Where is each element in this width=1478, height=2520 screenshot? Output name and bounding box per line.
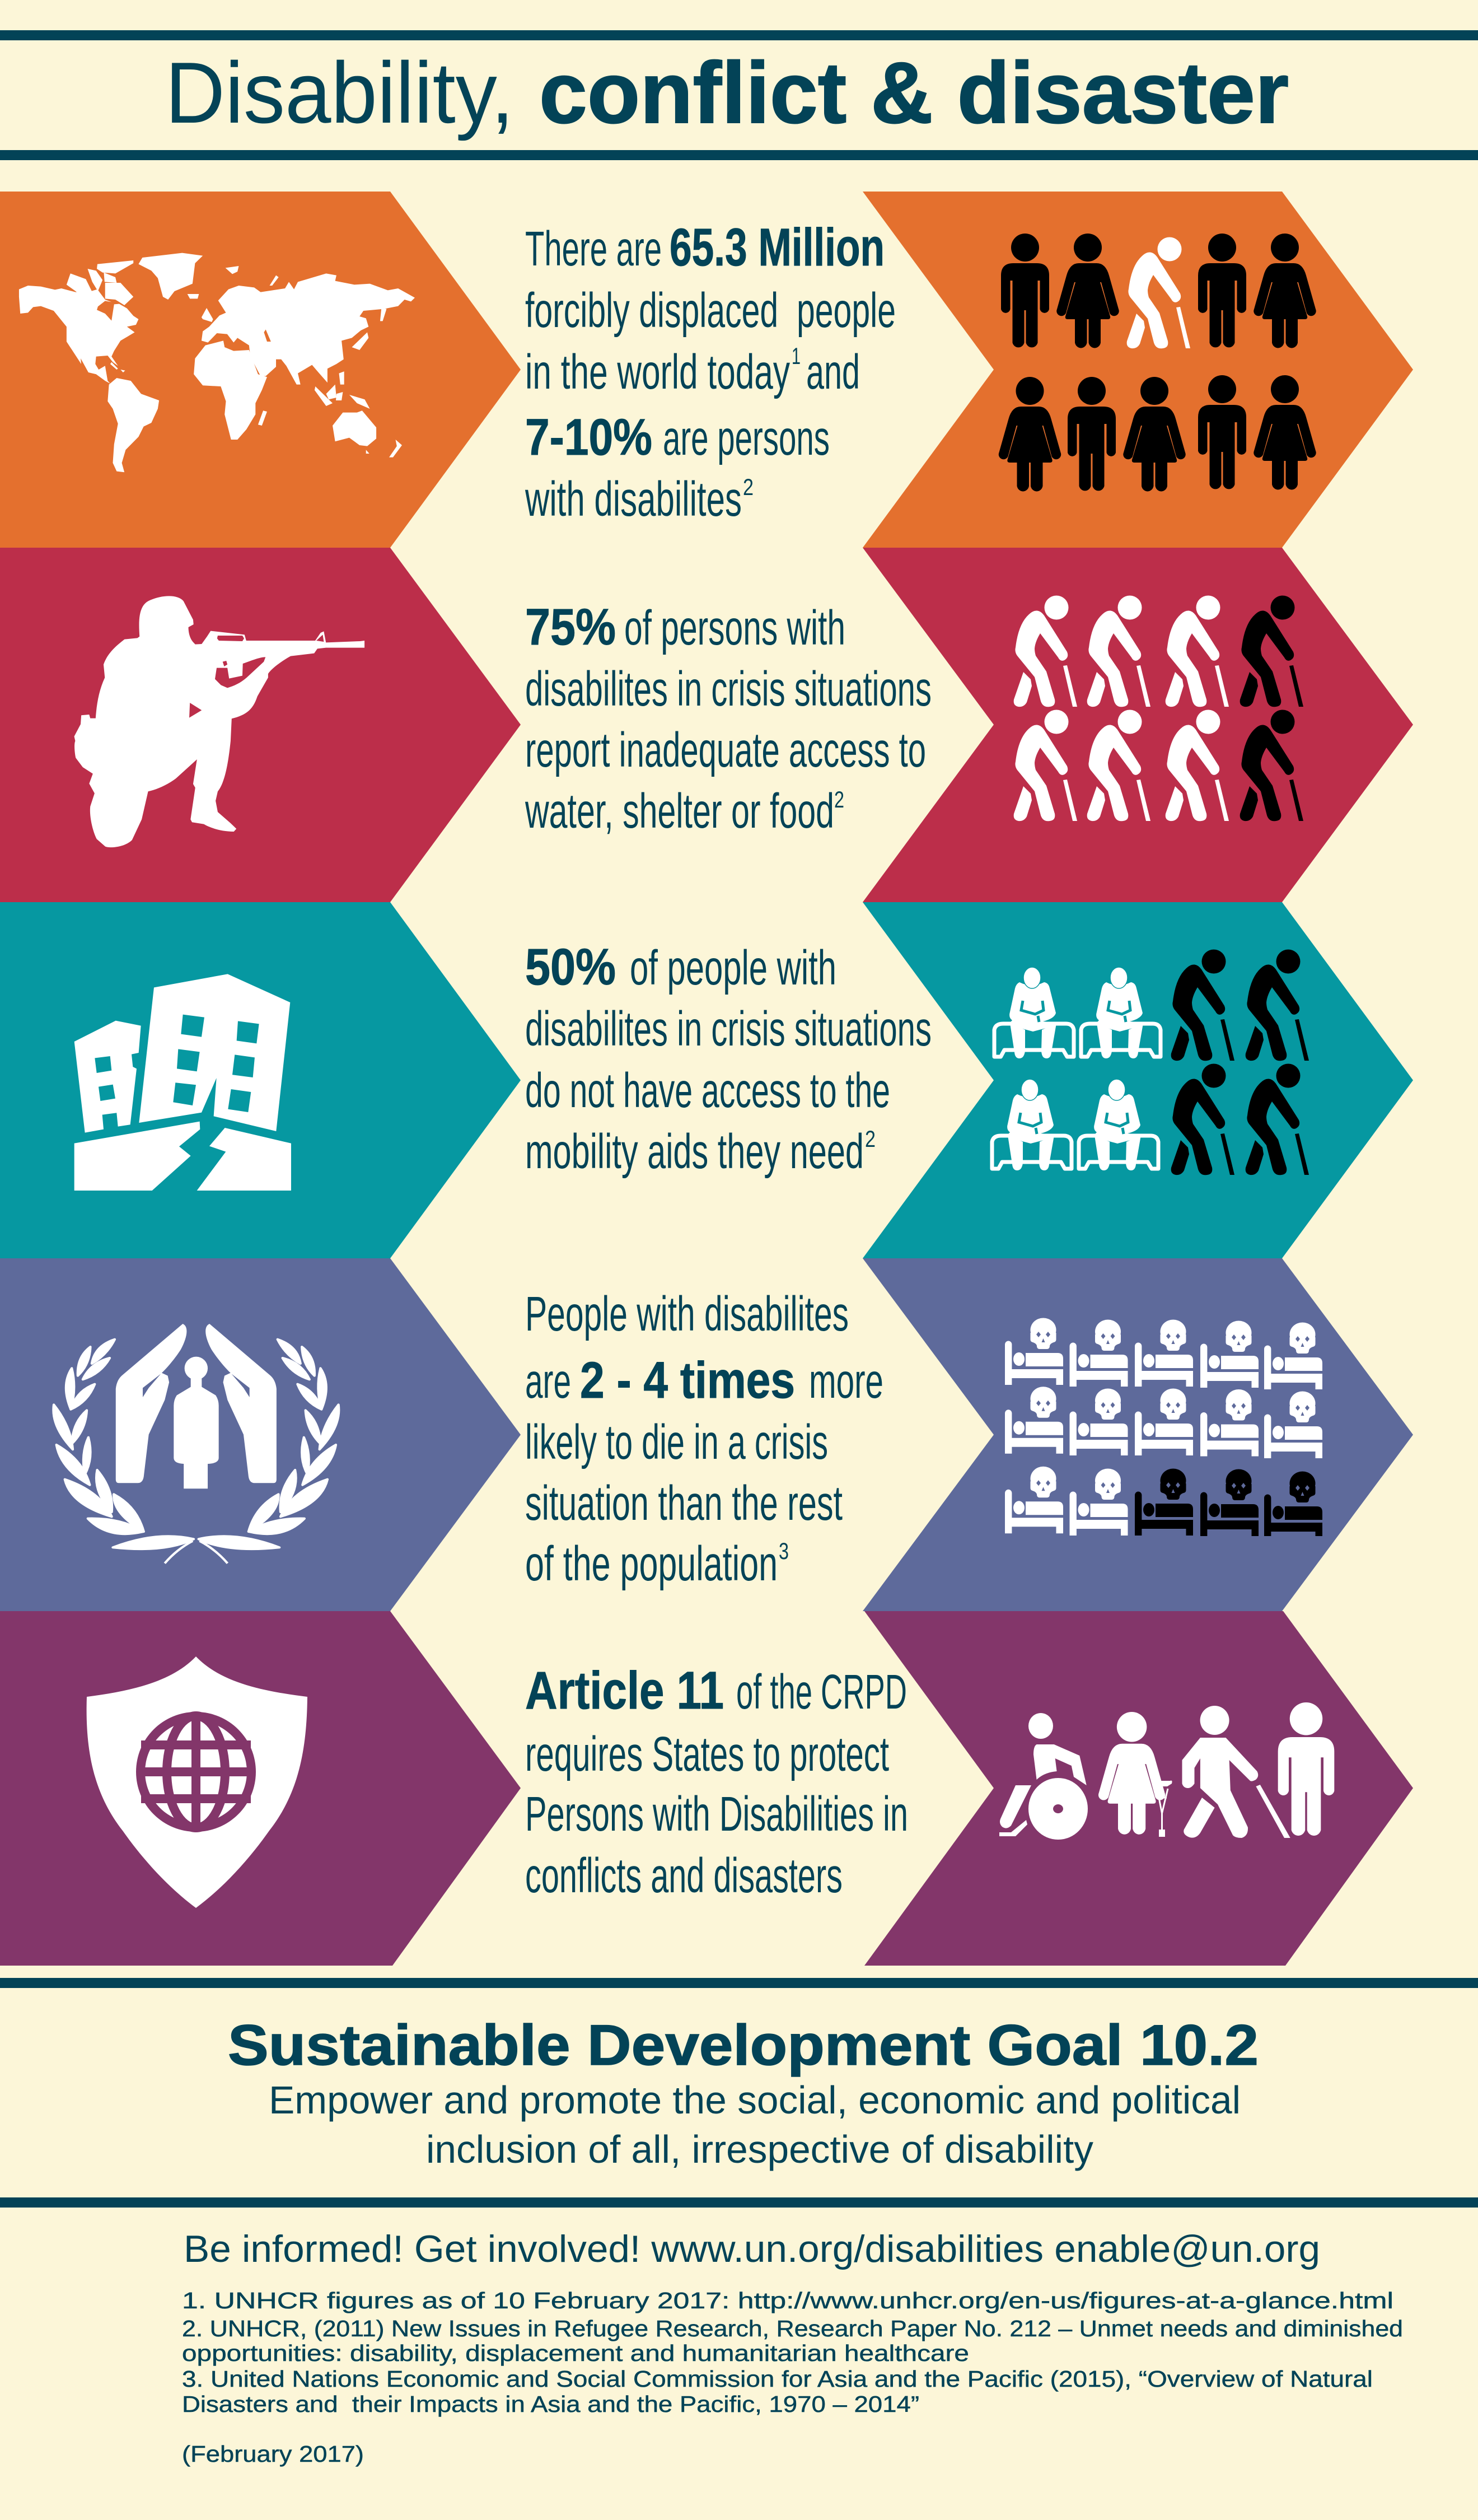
header rule top	[0, 30, 1478, 40]
text: displaced people statistic: There are	[525, 222, 662, 276]
title: conflict & disaster	[539, 44, 1289, 141]
teal right chevron	[863, 902, 1413, 1258]
text: mobility aids statistic: of people with	[630, 941, 836, 995]
text: Article 11 of the CRPD: requires States to protect	[525, 1727, 889, 1781]
footnotes: 2. UNHCR, (2011) New Issues in Refugee Research, Research Paper No. 212 – Unmet needs and diminished	[182, 2316, 1403, 2341]
text: inadequate access statistic	[525, 599, 932, 838]
call to action: Be informed! Get involved! www.un.org/disabilities enable@un.org	[184, 2228, 1320, 2270]
icon: wheelchair user	[999, 1713, 1088, 1840]
header rule bottom	[0, 150, 1478, 160]
text: mobility aids statistic: disabilites in crisis situations	[525, 1002, 932, 1056]
panel: mobility aids	[0, 902, 1413, 1258]
text: inadequate access statistic: disabilites in crisis situations	[525, 662, 932, 716]
section rule above goal	[0, 1978, 1478, 1988]
text: inadequate access statistic: of persons with	[624, 601, 845, 655]
text: inadequate access statistic: water, shelter or food	[525, 784, 834, 838]
panel: mortality	[0, 1258, 1413, 1611]
text: mobility aids statistic: 2	[865, 1126, 876, 1152]
text: displaced people statistic	[525, 218, 896, 526]
teal left chevron	[0, 902, 521, 1258]
footnotes: opportunities: disability, displacement and humanitarian healthcare	[182, 2340, 969, 2366]
text: mortality statistic: likely to die in a crisis	[525, 1415, 828, 1469]
text: displaced people statistic: are persons	[663, 411, 830, 465]
icon: kneeling soldier	[74, 596, 364, 847]
footnotes: Disasters and their Impacts in Asia and the Pacific, 1970 – 2014”	[182, 2391, 919, 2417]
text: inadequate access statistic: 2	[834, 786, 844, 813]
text: inadequate access statistic: 75%	[525, 599, 616, 656]
icon: shield with globe	[87, 1656, 307, 1908]
pictogram: seated and walking figures	[992, 950, 1309, 1175]
text: mortality statistic: 3	[779, 1538, 789, 1564]
panel: displaced people	[0, 192, 1413, 548]
text: mortality statistic: of the population	[525, 1537, 778, 1591]
purple right chevron	[864, 1611, 1413, 1966]
icon: world map	[19, 253, 415, 472]
goal description: inclusion of all, irrespective of disability	[426, 2127, 1093, 2171]
text: mortality statistic: more	[809, 1354, 883, 1408]
text: mobility aids statistic: 50%	[525, 939, 616, 996]
footnotes: 3. United Nations Economic and Social Commission for Asia and the Pacific (2015), “Overview of Natural	[182, 2366, 1373, 2392]
text: mobility aids statistic: mobility aids they need	[525, 1124, 864, 1179]
text: Article 11 of the CRPD: conflicts and disasters	[525, 1849, 843, 1903]
panel: Article 11	[0, 1611, 1413, 1966]
footnotes: 1. UNHCR figures as of 10 February 2017: http://www.unhcr.org/en-us/figures-at-a-glance.html	[182, 2288, 1393, 2313]
orange right chevron	[863, 192, 1413, 548]
text: Article 11 of the CRPD: Persons with Disabilities in	[525, 1787, 908, 1841]
blue left chevron	[0, 1258, 521, 1611]
icon: UNHCR emblem	[53, 1324, 339, 1564]
text: displaced people statistic: and	[806, 345, 860, 399]
goal description	[269, 2078, 1241, 2171]
text: mortality statistic: situation than the rest	[525, 1476, 843, 1530]
pictogram: beds with skulls	[1005, 1318, 1322, 1538]
text: inadequate access statistic: report inadequate access to	[525, 723, 926, 777]
text: displaced people statistic: with disabilites	[525, 472, 742, 526]
text: mortality statistic: are	[525, 1354, 571, 1408]
text: mortality statistic: 2 - 4 times	[580, 1352, 795, 1409]
blue right chevron	[863, 1258, 1413, 1611]
section rule below goal	[0, 2197, 1478, 2208]
text: displaced people statistic: 1	[792, 343, 801, 369]
text: mobility aids statistic: do not have access to the	[525, 1063, 890, 1118]
purple left chevron	[0, 1611, 521, 1966]
red left chevron	[0, 548, 521, 902]
text: displaced people statistic: 7-10%	[525, 409, 652, 466]
red right chevron	[863, 548, 1413, 902]
text: displaced people statistic: in the world today	[525, 345, 790, 399]
footnotes	[182, 2288, 1403, 2417]
pictogram: persons with disabilities	[999, 1702, 1334, 1840]
icon: walking man with cane	[1182, 1706, 1290, 1838]
text: mortality statistic	[525, 1287, 883, 1591]
icon: standing man	[1278, 1702, 1334, 1836]
text: displaced people statistic: 65.3 Million	[670, 218, 885, 277]
panel: inadequate access	[0, 548, 1413, 902]
text: mobility aids statistic	[525, 939, 932, 1179]
heading: Sustainable Development Goal 10.2: Sustainable Development Goal 10.2	[228, 2013, 1259, 2077]
text: Article 11 of the CRPD: Article 11	[525, 1661, 724, 1720]
text: Article 11 of the CRPD: of the CRPD	[736, 1665, 907, 1719]
title	[165, 44, 1289, 141]
text: displaced people statistic: 2	[743, 474, 754, 500]
pictogram: six of eight white elderly figures	[1014, 596, 1303, 821]
text: mortality statistic: People with disabilites	[525, 1287, 849, 1341]
icon: earthquake damaged buildings	[74, 974, 291, 1191]
orange left chevron	[0, 192, 521, 548]
goal description: Empower and promote the social, economic and political	[269, 2078, 1241, 2122]
date: (February 2017)	[182, 2441, 364, 2467]
text: displaced people statistic: forcibly displaced people	[525, 283, 896, 338]
title: Disability,	[165, 44, 514, 141]
text: Article 11 of the CRPD	[525, 1661, 908, 1903]
pictogram: ten people, one with disability	[999, 234, 1316, 491]
icon: woman with crutch	[1098, 1712, 1172, 1837]
